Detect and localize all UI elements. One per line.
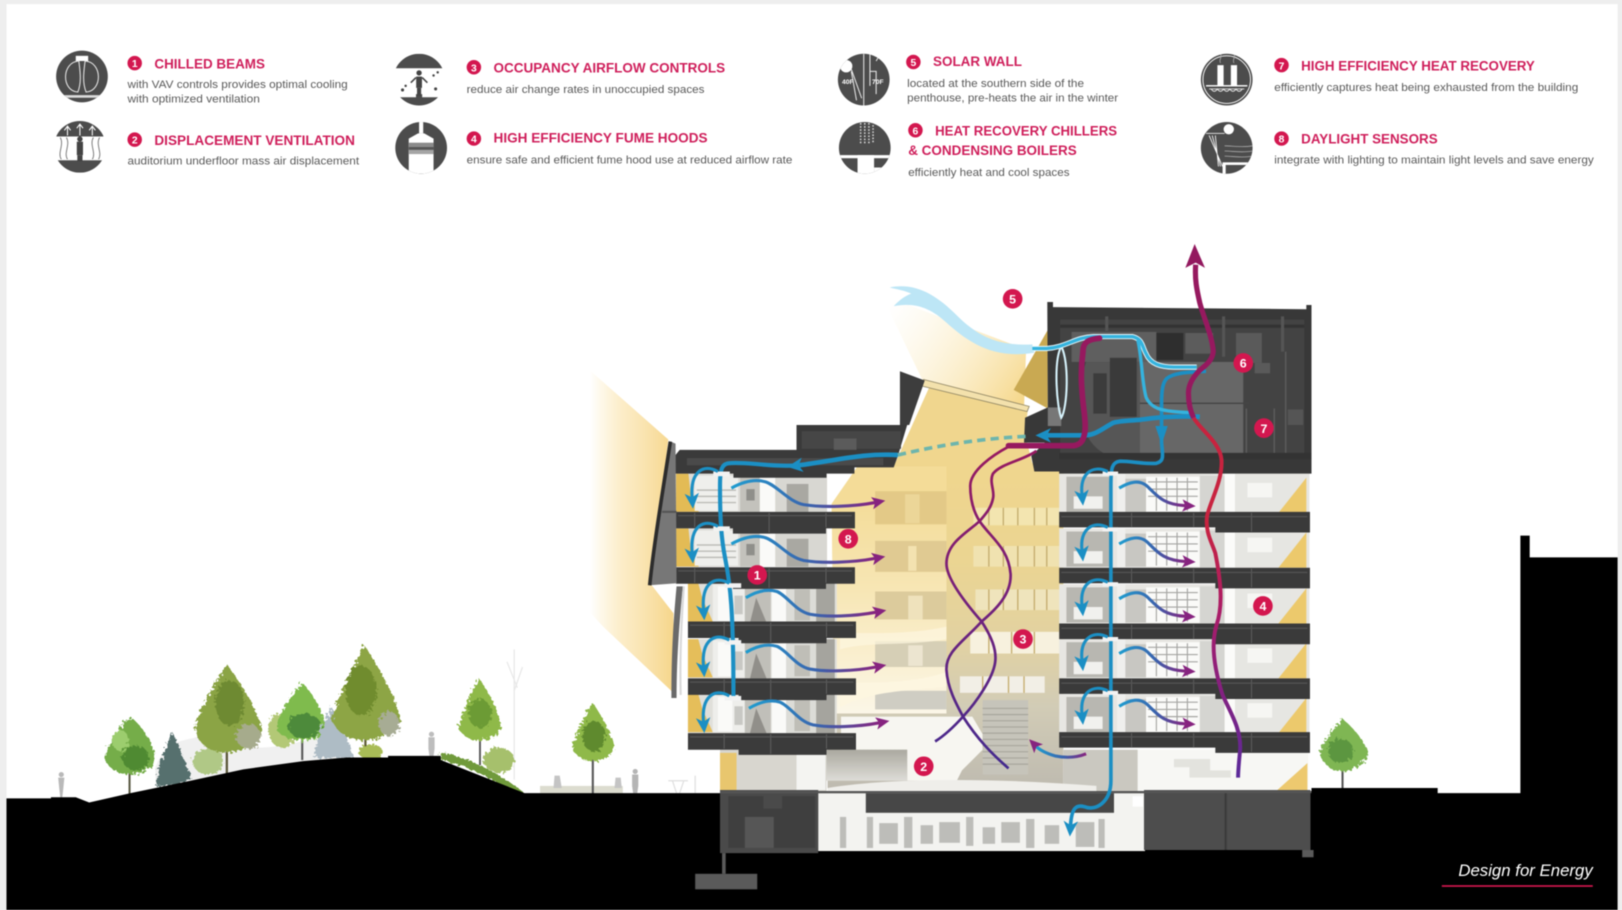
callout 1: 1 — [754, 569, 761, 583]
callout 8 — [838, 529, 858, 549]
legend item 2: displacement ventilation — [54, 121, 360, 173]
atrium window mullions — [983, 508, 1047, 693]
left wing floors — [676, 474, 837, 733]
callout 3 — [1013, 629, 1033, 649]
tree right of building — [1320, 719, 1368, 789]
number badge 1: 1 — [132, 59, 138, 70]
description: daylight sensors: integrate with lighting to maintain light levels and save energy — [1274, 154, 1594, 166]
sunlight beam over solar wall — [881, 295, 1026, 408]
spruce blue — [314, 706, 354, 758]
main building exhaust stack lower — [1194, 418, 1240, 778]
legend item 4: fume hoods — [395, 120, 792, 174]
spruce dark — [155, 731, 192, 786]
icon: occupancy airflow controls — [393, 54, 445, 105]
atrium window rows — [960, 508, 1060, 693]
right wing supply riser — [1071, 371, 1206, 825]
footer caption: Design for Energy: Design for Energy — [1458, 861, 1595, 880]
supply air duct to left wing — [720, 455, 898, 697]
penthouse mechanical room — [1024, 302, 1312, 474]
atrium left light zone — [832, 466, 946, 714]
callout 4: 4 — [1259, 600, 1266, 614]
legend item 6: heat recovery chillers — [839, 122, 1117, 179]
return air duct — [1009, 338, 1100, 446]
icon: solar wall: 40F — [842, 79, 854, 86]
left wing floor slabs — [676, 512, 856, 755]
legend item 3: occupancy airflow controls — [393, 54, 725, 105]
number badge 7: 7 — [1279, 61, 1285, 72]
number badge 4: 4 — [471, 135, 477, 146]
heading: high efficiency heat recovery: HIGH EFFICIENCY HEAT RECOVERY — [1301, 57, 1536, 73]
tree F — [572, 703, 613, 794]
heading: daylight sensors: DAYLIGHT SENSORS — [1301, 131, 1438, 147]
south facade curtain wall lower — [671, 586, 684, 698]
shrubs — [358, 745, 383, 759]
person left — [58, 772, 64, 797]
icon: solar wall: 70F — [872, 79, 884, 86]
foundation footing — [695, 850, 1314, 889]
stack arrowhead — [1185, 244, 1205, 268]
landscape: trees and people — [58, 645, 1368, 797]
atrium curved balcony fronts — [840, 627, 946, 707]
right wing room exhaust waves — [1119, 482, 1185, 724]
skylight — [921, 380, 1029, 412]
icon: fume hoods — [395, 120, 447, 174]
legend item 8: daylight sensors — [1201, 122, 1594, 177]
callout 8: 8 — [845, 532, 852, 546]
description: chilled beams: with VAV controls provides optimal cooling — [126, 79, 348, 91]
auditorium seating wedge — [827, 750, 907, 781]
description: displacement ventilation: auditorium underfloor mass air displacement — [127, 155, 360, 167]
seated people — [554, 776, 622, 788]
callout 7 — [1254, 418, 1274, 438]
building section — [650, 302, 1314, 889]
callout 7: 7 — [1260, 422, 1267, 436]
callout 6 — [1233, 353, 1253, 373]
street lamp — [507, 649, 522, 780]
number badge 1 — [127, 56, 142, 70]
number badge 6: 6 — [913, 126, 919, 137]
preheated air duct — [1032, 337, 1197, 413]
description: chillers: efficiently heat and cool spaces — [908, 167, 1070, 179]
icon: heat recovery chillers — [839, 122, 891, 176]
number badge 6 — [908, 123, 923, 138]
heading: high efficiency fume hoods: HIGH EFFICIENCY FUME HOODS — [494, 130, 708, 146]
atrium light well — [827, 380, 1073, 791]
solar wall loop — [1056, 346, 1067, 418]
tree C — [276, 682, 326, 760]
description: chilled beams — [126, 79, 348, 105]
stairs — [983, 700, 1028, 775]
number badge 2 — [127, 132, 142, 147]
icon: daylight sensors — [1201, 122, 1254, 177]
callout 6: 6 — [1240, 357, 1247, 371]
right wing floors — [1059, 474, 1309, 733]
icon: displacement ventilation — [54, 121, 106, 173]
shrub — [483, 748, 514, 772]
slope planting — [441, 753, 524, 794]
shrub on slope — [268, 712, 297, 748]
number badge 3 — [467, 60, 481, 74]
numbered callouts on section — [747, 289, 1274, 776]
number badge 5: 5 — [910, 58, 916, 69]
left wing room supply hooks — [692, 468, 741, 722]
number badge 3: 3 — [471, 63, 477, 74]
tree D — [332, 645, 400, 757]
main building exhaust stack upper — [1188, 265, 1213, 418]
tree B — [195, 664, 262, 774]
heading: chilled beams: CHILLED BEAMS — [154, 55, 265, 71]
heading: solar wall: SOLAR WALL — [933, 53, 1022, 69]
tree E — [458, 678, 501, 765]
left wing roof plenum — [676, 425, 907, 478]
legend item 1: chilled beams — [56, 51, 348, 105]
legend item 5: solar wall — [838, 53, 1118, 105]
icon: chilled beams — [56, 51, 108, 102]
supply air into atrium — [1047, 416, 1200, 435]
icon: heat recovery — [1201, 54, 1253, 105]
basement level — [720, 790, 1312, 853]
ground section silhouette — [6, 536, 1618, 910]
cafe tables — [668, 776, 695, 793]
incoming fresh air ribbon — [890, 286, 1034, 354]
dashed air path across atrium — [898, 436, 1026, 455]
callout 2: 2 — [920, 760, 927, 774]
sunlight beam on south facade — [590, 370, 673, 693]
description: solar wall: located at the southern side of the — [907, 78, 1084, 90]
callout 5: 5 — [1009, 293, 1016, 307]
description: solar wall: penthouse, pre-heats the air in the winter — [907, 92, 1118, 104]
icon: solar wall — [838, 54, 890, 105]
number badge 8: 8 — [1279, 135, 1285, 146]
auditorium white wall — [841, 717, 983, 781]
upper clerestory wedge — [900, 371, 925, 425]
atrium twisted exhaust strands — [935, 447, 1036, 768]
riser arrowhead in penthouse — [1155, 426, 1168, 445]
callout 2 — [914, 756, 934, 776]
solar wall panel — [1014, 330, 1048, 408]
person walking — [632, 769, 638, 793]
callout 3: 3 — [1020, 633, 1027, 647]
number badge 7 — [1274, 58, 1289, 72]
number badge 8 — [1274, 131, 1289, 146]
number badge 2: 2 — [132, 136, 138, 147]
callout 4 — [1253, 596, 1273, 616]
description: occupancy airflow controls: reduce air change rates in unoccupied spaces — [467, 84, 705, 96]
heading: heat recovery chillers and condensing boilers: & CONDENSING BOILERS — [908, 142, 1077, 158]
number badge 5 — [906, 55, 921, 69]
number badge 4 — [467, 131, 481, 146]
ground floor arrow — [1036, 747, 1086, 757]
shrub — [193, 748, 224, 775]
callout 1 — [747, 565, 767, 585]
laboratory furniture — [840, 817, 1105, 848]
legend: energy strategies — [54, 51, 1594, 179]
ground floor — [720, 750, 1308, 791]
left wing room exhaust waves — [731, 481, 879, 727]
description: solar wall — [907, 78, 1118, 104]
person on hill — [428, 732, 435, 756]
south facade curtain wall upper — [650, 442, 677, 585]
callout 5 — [1003, 289, 1022, 309]
tree A — [105, 717, 155, 794]
heading: heat recovery chillers and condensing boilers — [908, 122, 1117, 158]
heading: displacement ventilation: DISPLACEMENT VENTILATION — [154, 132, 355, 148]
benches — [540, 786, 623, 793]
description: heat recovery: efficiently captures heat being exhausted from the building — [1274, 82, 1578, 94]
right wing floor slabs — [1059, 512, 1310, 753]
airflow arrows — [692, 244, 1240, 825]
right wing room supply hooks — [1082, 469, 1118, 714]
description: fume hoods: ensure safe and efficient fume hood use at reduced airflow rate — [467, 154, 792, 166]
background haze — [155, 729, 352, 786]
description: chilled beams: with optimized ventilation — [126, 93, 260, 105]
heading: occupancy airflow controls: OCCUPANCY AIRFLOW CONTROLS — [494, 59, 725, 75]
atrium balconies — [875, 491, 946, 709]
heading: heat recovery chillers and condensing boilers: HEAT RECOVERY CHILLERS — [935, 122, 1117, 138]
legend item 7: heat recovery — [1201, 54, 1578, 105]
